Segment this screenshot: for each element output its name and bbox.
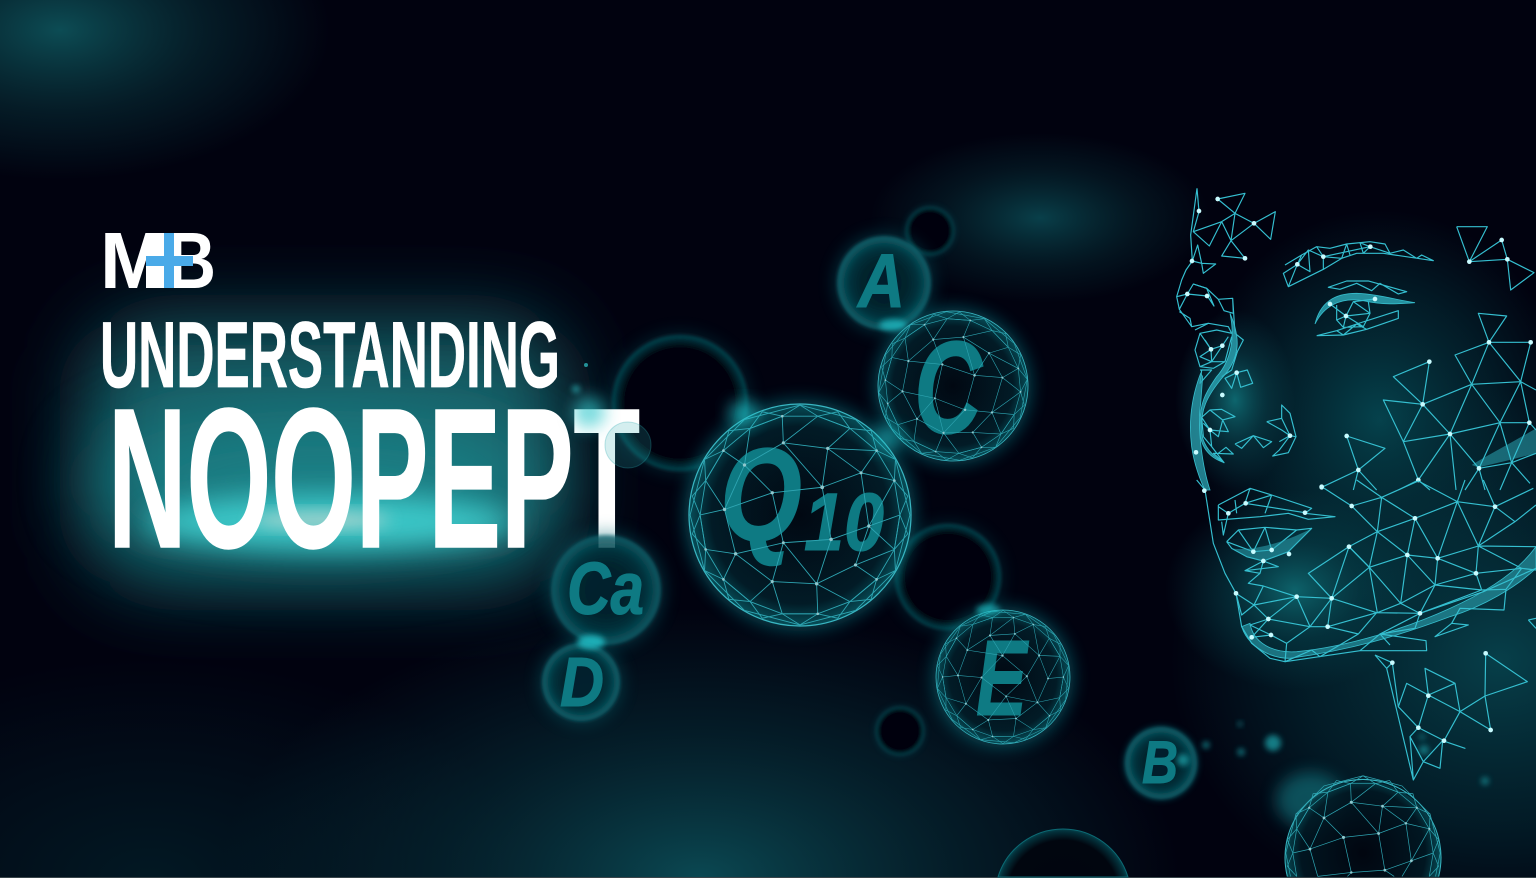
- bubble: empty lower small: [874, 705, 926, 757]
- logo: B: [167, 216, 216, 305]
- left eye: [1195, 323, 1232, 368]
- bubble: Ca: Ca: [567, 547, 644, 630]
- sphere: E: [909, 583, 1097, 771]
- sphere: Q10: [684, 399, 916, 631]
- Q10 label: [720, 421, 884, 568]
- jaw band: [1242, 547, 1536, 658]
- bubble: D: [539, 635, 623, 724]
- lips: [1218, 488, 1335, 598]
- bubble: empty large left: [609, 332, 751, 474]
- neck mesh: [1375, 653, 1527, 780]
- lower nodes: [1202, 484, 1497, 743]
- sphere: C: [853, 286, 1053, 486]
- forehead and temple: [1177, 188, 1275, 309]
- title glow: [85, 320, 565, 585]
- bubble: Ca: [547, 531, 665, 649]
- bubble: bottom partial: [998, 829, 1128, 877]
- Q10 label: 10: [804, 477, 884, 568]
- bubble: B: B: [1142, 729, 1178, 796]
- face edge band: [1190, 373, 1210, 490]
- face outline: [1197, 480, 1536, 662]
- particles near T: [572, 363, 605, 428]
- bubble: A: A: [856, 239, 905, 324]
- bubble: A: [834, 233, 934, 333]
- cheek lower mesh: [1271, 480, 1536, 662]
- bubble: D: D: [560, 643, 604, 721]
- sphere: E: E: [976, 617, 1029, 738]
- right eye: [1328, 281, 1407, 294]
- chin mesh: [1236, 547, 1377, 637]
- cheek mesh: [1322, 313, 1536, 490]
- bubble: small over T: [605, 422, 651, 468]
- cheek band: [1200, 313, 1237, 463]
- Q10 label: Q: [720, 421, 802, 568]
- upper nodes: [1185, 197, 1533, 490]
- brow: [1283, 242, 1433, 287]
- sphere: C: C: [914, 314, 983, 461]
- nostrils: [1202, 405, 1296, 463]
- logo: M: [100, 216, 166, 305]
- particles right: [1202, 722, 1489, 785]
- title line: understanding: UNDERSTANDING: [100, 302, 560, 407]
- nose bridge: [1179, 284, 1253, 388]
- bubble: B: [1123, 725, 1199, 801]
- bubble: empty right: [893, 522, 1003, 632]
- logo: [100, 216, 216, 305]
- bubble: empty upper small: [904, 205, 956, 257]
- sphere: bottom right: [1276, 772, 1441, 877]
- cheek shine: [1472, 428, 1536, 467]
- right forehead: [1457, 227, 1534, 290]
- face: lower wireframe: [1197, 480, 1536, 780]
- title line: noopept: NOOPEPT: [108, 368, 640, 590]
- face: upper wireframe: [1177, 188, 1536, 490]
